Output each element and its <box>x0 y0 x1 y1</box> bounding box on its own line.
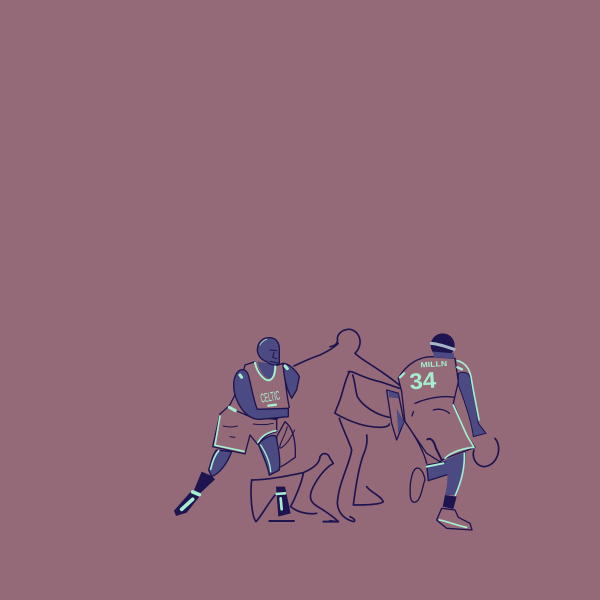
jersey number <box>268 401 276 409</box>
shoe highlight <box>439 520 467 527</box>
shoulder highlight <box>400 367 462 377</box>
neck <box>433 352 454 359</box>
shorts fold <box>427 439 442 460</box>
front leg highlight <box>455 453 464 495</box>
rear shorts crease <box>280 427 295 448</box>
back leg <box>209 450 232 477</box>
back leg <box>427 462 449 481</box>
shorts creases <box>223 423 273 437</box>
player: number 34 <box>387 333 499 530</box>
front leg highlight <box>261 445 271 472</box>
jersey and shorts <box>398 357 475 462</box>
arm bright edge <box>457 361 479 420</box>
court shadow <box>269 518 338 525</box>
face shadow <box>270 350 278 363</box>
player name: MILLN <box>420 359 447 369</box>
head highlight <box>260 339 267 345</box>
collar <box>255 363 275 380</box>
front leg <box>445 452 466 495</box>
back leg band <box>427 463 443 467</box>
player: Celtics defender <box>174 338 338 522</box>
basketball <box>473 438 499 467</box>
near arm <box>234 370 288 419</box>
arm <box>456 359 495 438</box>
shorts highlights <box>445 405 474 458</box>
shorts creases <box>405 397 454 463</box>
back leg highlight <box>211 451 219 469</box>
ghost defender body outline <box>330 329 404 522</box>
ghost defender lower left outline <box>251 343 338 522</box>
head <box>257 338 279 365</box>
shoe highlight <box>182 492 199 509</box>
rear arm shading <box>388 391 404 433</box>
jersey <box>228 362 289 419</box>
shorts <box>213 407 277 454</box>
arm highlights <box>229 366 287 411</box>
front sock and shoe <box>276 487 291 517</box>
ghost foot <box>410 468 425 502</box>
front leg <box>258 435 280 475</box>
neck <box>257 362 275 379</box>
player: Celtics defender: CELTIC <box>259 388 281 406</box>
head <box>431 333 455 357</box>
rear shorts outline <box>277 422 295 467</box>
headband <box>431 343 454 349</box>
shoe <box>437 508 472 530</box>
arm shading <box>458 372 486 437</box>
front sock highlight <box>277 493 285 509</box>
rear arm <box>387 390 404 440</box>
sock <box>443 495 457 509</box>
far arm <box>283 363 299 398</box>
jersey number 34: 34 <box>409 366 437 394</box>
back shoe <box>174 491 201 516</box>
shorts hem highlights <box>215 416 276 451</box>
back leg sock <box>194 472 215 493</box>
